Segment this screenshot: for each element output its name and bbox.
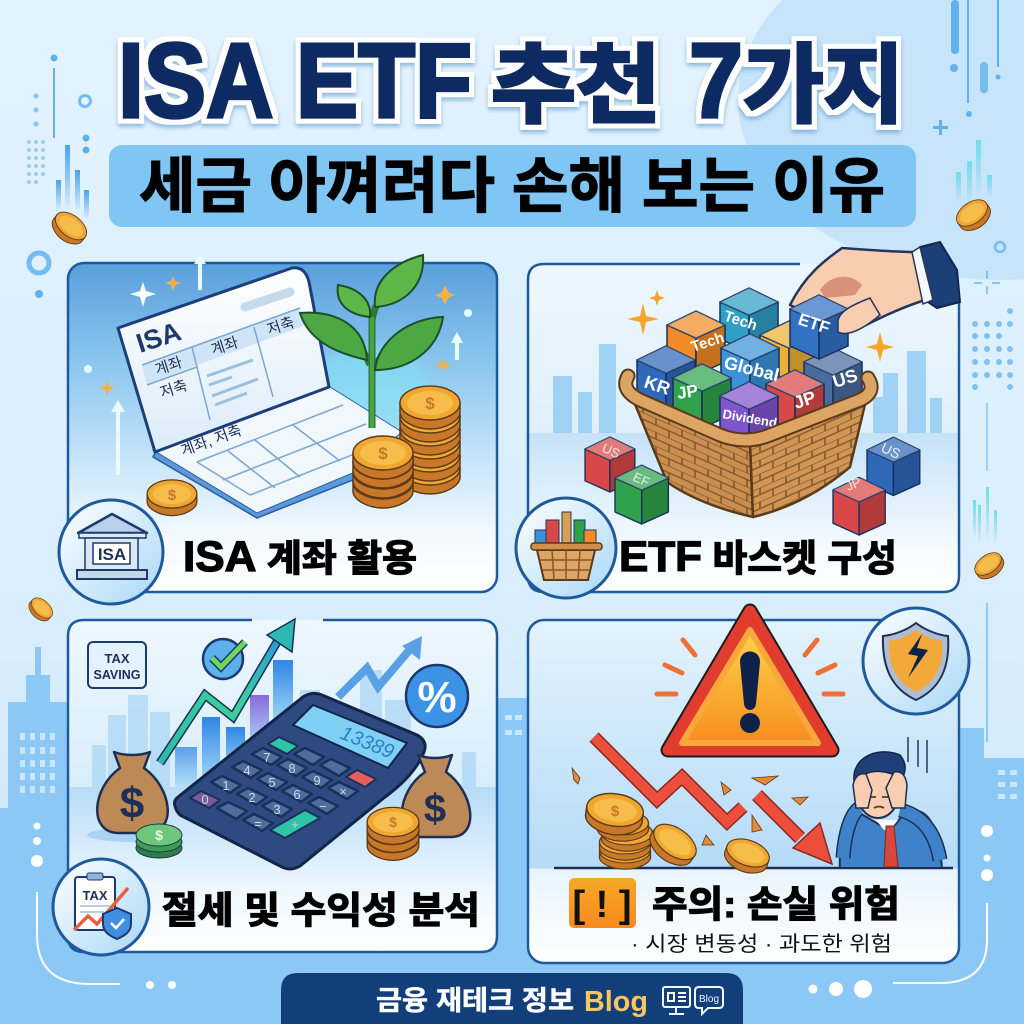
panel: loss risk [528, 608, 969, 963]
icon: hand holding ETF cube [790, 242, 960, 359]
icon: loose cubes [585, 437, 920, 535]
icon: falling red arrow [594, 737, 832, 864]
icon: tax clipboard [53, 859, 149, 955]
icon: tax clipboard: TAX [82, 888, 108, 903]
label: 주의: 손실 위험 [652, 884, 900, 925]
icon: tax saving note [88, 642, 146, 688]
icon: loose cubes: EF [631, 469, 652, 490]
icon: tax saving note: SAVING [94, 668, 140, 682]
label: ETF 바스켓 구성 [619, 533, 897, 581]
icon: monitor [663, 987, 690, 1014]
icon: cubes in basket: Global [722, 352, 781, 385]
icon: plant [300, 255, 443, 428]
icon: ground line [554, 867, 953, 869]
icon: coin stacks [147, 386, 460, 516]
label: ISA 계좌 활용 [183, 533, 417, 581]
title: 가지 [743, 38, 904, 134]
icon: coin stacks: $ [168, 487, 177, 504]
icon: basket badge [516, 498, 616, 598]
icon: cubes in basket: US [830, 365, 860, 392]
panel: ISA account [59, 254, 497, 604]
icon: cubes in basket: Tech [689, 329, 726, 356]
footer [281, 973, 743, 1024]
chart: background skyline [92, 670, 476, 787]
icon: calculator: 7 [263, 750, 271, 765]
icon: open ledger: 계좌 [209, 334, 241, 359]
icon: open ledger [118, 268, 402, 518]
icon: calculator: + [291, 817, 299, 832]
chart: background bars [553, 344, 942, 433]
chart: growth bars [175, 660, 293, 787]
icon: calculator: 4 [243, 763, 251, 778]
footer: 금융 재테크 정보 [376, 986, 574, 1016]
icon: percent badge: % [417, 673, 457, 722]
icon: green chips [136, 824, 182, 858]
icon: green chips: $ [155, 827, 163, 843]
icon: calculator: 5 [268, 775, 276, 790]
icon: money bag left: $ [120, 779, 144, 828]
title: 추천 [491, 38, 661, 134]
icon: calculator: 13389 [337, 722, 397, 763]
label: 절세 및 수익성 분석 [162, 890, 480, 931]
icon: tax saving note: TAX [104, 651, 130, 666]
icon: coin stack: $ [389, 814, 397, 830]
icon: cubes in basket: JP [676, 381, 699, 403]
icon: calculator: 1 [222, 778, 230, 793]
icon: percent badge [406, 665, 468, 727]
icon: cubes in basket: Dividend [721, 406, 778, 430]
icon: worried man [840, 737, 942, 868]
icon: cubes in basket [637, 288, 862, 446]
icon: debris [572, 768, 808, 845]
icon: calculator: 3 [273, 802, 281, 817]
icon: coin stack [367, 807, 419, 860]
panel: tax saving analysis [53, 619, 497, 955]
icon: calculator: − [319, 799, 327, 814]
icon: check badge [203, 639, 245, 679]
icon: rising arrow [160, 619, 295, 763]
icon: calculator: 9 [313, 773, 321, 788]
icon: open ledger: 계좌 [153, 354, 185, 379]
icon: ISA bank: ISA [98, 545, 126, 564]
icon: open ledger: ISA [133, 316, 185, 359]
icon: open ledger: 저축 [158, 377, 189, 402]
icon: money bag right: $ [424, 787, 446, 831]
icon: cubes in basket: Tech [722, 308, 759, 334]
icon: cubes in basket: JP [791, 387, 818, 413]
icon: shield badge [863, 608, 969, 714]
icon: falling coins: $ [611, 803, 620, 820]
icon: ISA bank [59, 500, 163, 604]
icon: glowing arrows and sparkles [84, 254, 472, 475]
icon: calculator: × [339, 784, 347, 799]
icon: calculator: 8 [288, 761, 296, 776]
icon: loose cubes: US [600, 440, 623, 461]
subtitle band: 세금 아껴려다 손해 보는 이유 [139, 153, 885, 220]
icon: calculator: 2 [248, 790, 256, 805]
icon: warning triangle [668, 611, 832, 750]
icon: coin stacks: $ [425, 394, 435, 413]
icon: calculator: 6 [293, 787, 301, 802]
icon: blog bubble [695, 987, 723, 1014]
icon: falling coins [583, 790, 773, 879]
icon: hand holding ETF cube: ETF [796, 310, 832, 338]
icon: blog bubble: Blog [699, 994, 719, 1005]
icon: warning bracket: [ ! ] [572, 884, 632, 926]
icon: burst lines [657, 640, 843, 694]
footer: Blog [584, 986, 648, 1018]
icon: calculator [174, 693, 425, 869]
icon: open ledger: 계좌, 저축 [179, 422, 244, 460]
icon: loose cubes: JP [844, 474, 863, 494]
icon: rising arrow 2 [338, 636, 422, 697]
icon: sparkles [627, 290, 894, 362]
title: 7 [689, 22, 743, 140]
icon: cubes in basket: KR [642, 372, 673, 399]
title [118, 22, 904, 140]
decorative coins [25, 194, 1008, 625]
panel: ETF basket [516, 242, 960, 598]
icon: calculator: 0 [201, 792, 209, 807]
icon: coin stacks: $ [378, 444, 388, 463]
title: ISA ETF [118, 22, 472, 140]
list of risks: · 시장 변동성 · 과도한 위험 [631, 933, 892, 956]
icon: calculator: = [254, 816, 262, 831]
icon: money bag left [87, 752, 177, 842]
icon: open ledger: 저축 [265, 314, 296, 339]
icon: money bag right [402, 755, 470, 837]
icon: loose cubes: US [879, 439, 903, 462]
icon: basket [626, 376, 871, 517]
